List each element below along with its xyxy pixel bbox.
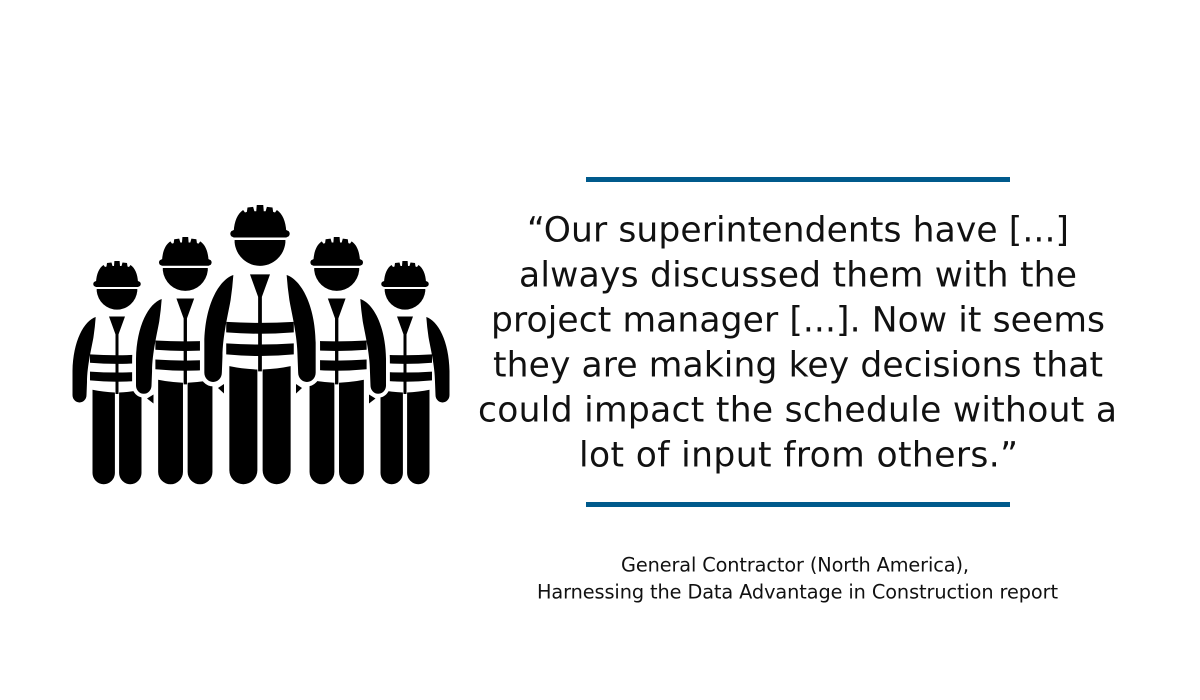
quote text: they are making key decisions that (493, 345, 1103, 385)
icon: group of five construction workers (72, 205, 450, 484)
icon: worker centre (204, 205, 316, 484)
bottom rule (586, 502, 1010, 507)
attribution (537, 554, 1058, 604)
quote text: “Our superintendents have [...] (527, 210, 1069, 250)
quote text: always discussed them with the (519, 255, 1077, 295)
icon: worker far left (72, 261, 149, 484)
icon: worker far right (373, 261, 450, 484)
quote text: project manager [...]. Now it seems (491, 300, 1105, 340)
icon: worker inner left (136, 237, 221, 484)
icon: worker inner right (301, 237, 386, 484)
quote text: lot of input from others.” (579, 435, 1018, 475)
attribution: Harnessing the Data Advantage in Construction report (537, 581, 1058, 604)
attribution: General Contractor (North America), (621, 554, 969, 576)
quote text: could impact the schedule without a (478, 390, 1117, 430)
quote text (478, 210, 1117, 475)
top rule (586, 177, 1010, 182)
icon: hidden arm remnants (147, 384, 376, 404)
